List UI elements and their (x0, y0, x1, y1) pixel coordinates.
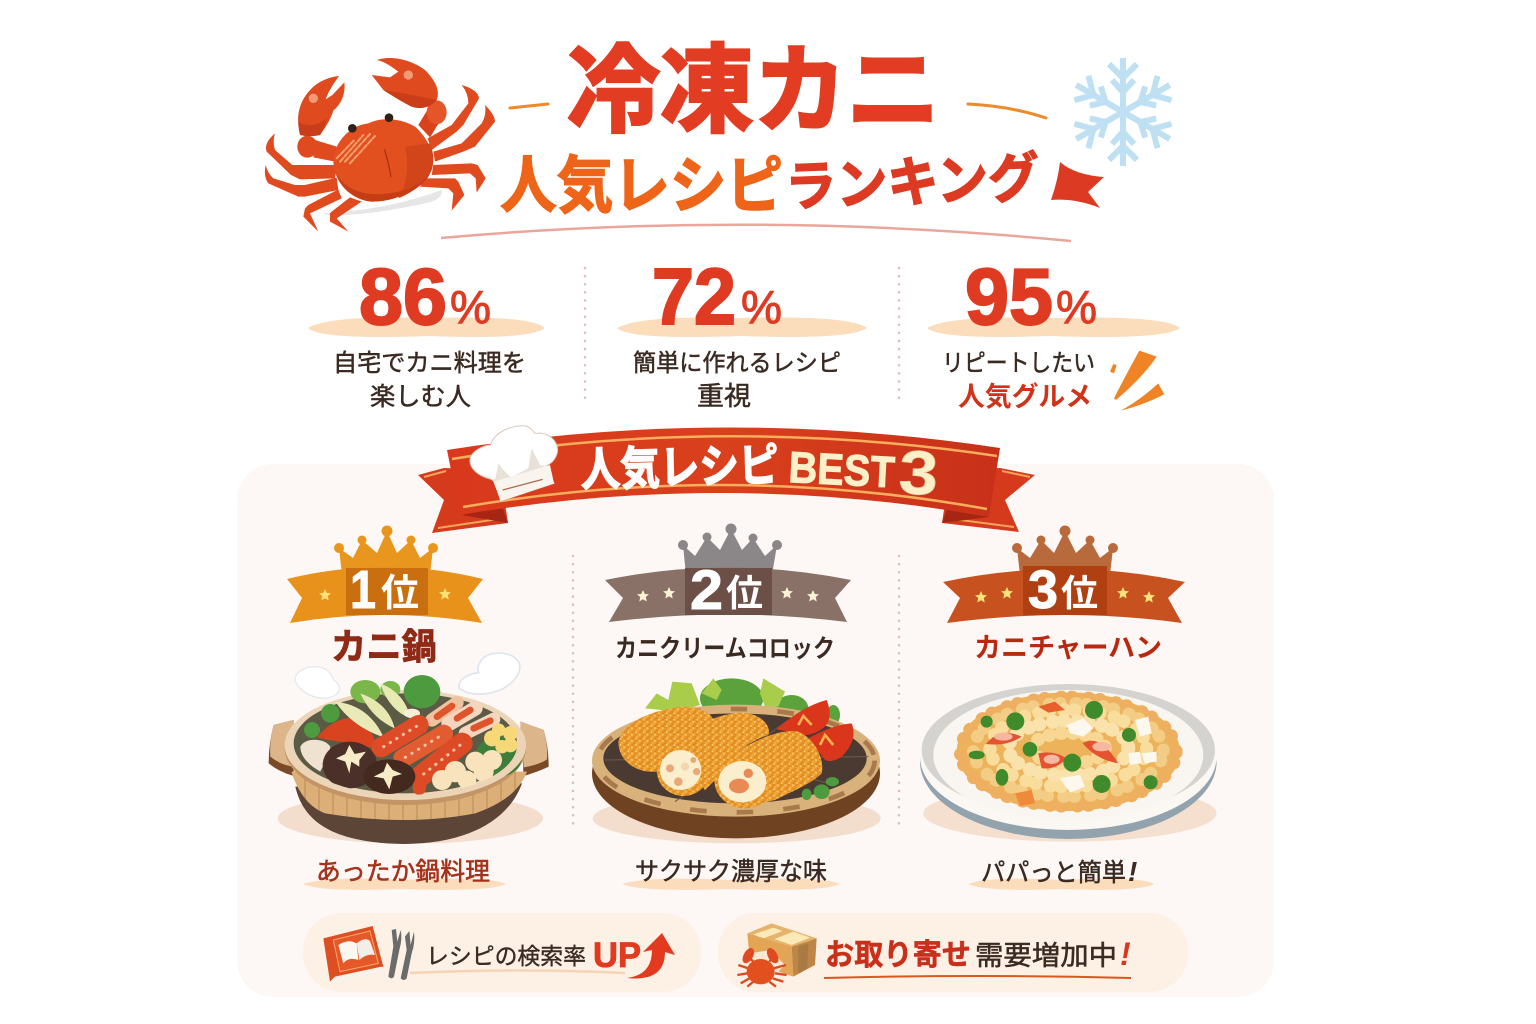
crown: bronze (1012, 526, 1118, 575)
icon: up arrow (627, 933, 675, 978)
tagline: サクサク濃厚な味: サクサク濃厚な味 (635, 852, 827, 888)
crown: silver (678, 524, 782, 575)
tagline: パパっと簡単！: ! (1128, 856, 1137, 887)
title (500, 13, 1040, 225)
banner: 1位: 位 (381, 562, 419, 617)
banner: 1位: 1 (350, 560, 376, 620)
banner: 1位 (287, 560, 483, 623)
stat: 86%: % (450, 281, 491, 333)
ribbon heading: BEST (787, 443, 896, 498)
rank 1 column (269, 526, 549, 890)
icon: crab (265, 58, 495, 232)
stat: 72%: % (741, 281, 782, 333)
callout: search rate up (303, 913, 701, 992)
rank 3 column (920, 526, 1217, 890)
stat: 86%: 自宅でカニ料理を (333, 343, 526, 378)
crown: gold (334, 526, 438, 575)
icon: recipe book (323, 926, 383, 983)
title line 2: ランキング (784, 133, 1040, 222)
callout: search rate up: レシピの検索率 (426, 937, 586, 971)
icon: small crab (737, 946, 787, 987)
stat: 95%: 人気グルメ (958, 375, 1092, 414)
icon: red flag (1051, 162, 1104, 208)
banner: 3位: 3 (1028, 560, 1058, 620)
ribbon heading: 人気レシピ (580, 429, 779, 500)
callout: search rate up: UP (593, 936, 641, 975)
stat: 86%: 楽しむ人 (370, 377, 471, 413)
title line 2 (500, 133, 1040, 225)
ribbon heading: 3 (897, 438, 940, 509)
stat: 95%: リピートしたい (942, 343, 1095, 378)
dish name: カニチャーハン: カニチャーハン (974, 626, 1162, 665)
dish name: カニ鍋: カニ鍋 (331, 618, 437, 670)
callout: mail order demand rising: ! (1120, 936, 1131, 972)
illustration: crab fried rice (920, 683, 1217, 842)
tagline: パパっと簡単！: パパっと簡単 (981, 853, 1126, 889)
callout: mail order demand rising: 需要増加中 (975, 934, 1117, 973)
illustration: crab cream croquettes (592, 678, 881, 843)
stat: 72%: 重視 (697, 376, 751, 413)
tagline: あったか鍋料理: あったか鍋料理 (316, 852, 490, 888)
dish name: カニクリームコロック: カニクリームコロック (615, 629, 835, 665)
stat: 72%: 簡単に作れるレシピ (633, 343, 841, 378)
stat: 95% (927, 252, 1180, 414)
stat: 95%: 95 (965, 252, 1053, 341)
banner: 3位 (943, 560, 1185, 623)
banner: 2位: 2 (690, 558, 723, 621)
stat: 86% (308, 252, 545, 413)
title line 1: 冷凍カニ (567, 13, 940, 152)
banner: 3位: 位 (1061, 563, 1098, 617)
title line 2: 人気レシピ (500, 135, 783, 225)
stat: 72%: 72 (652, 252, 736, 341)
banner: 2位: 位 (726, 563, 763, 617)
callout: mail order demand rising (718, 913, 1188, 992)
stat: 86%: 86 (359, 252, 447, 341)
banner: 2位 (605, 558, 851, 622)
background panel (237, 464, 1274, 997)
dotted dividers (573, 268, 899, 830)
callout: mail order demand rising: お取り寄せ (825, 930, 971, 974)
stat: 95%: % (1056, 281, 1097, 333)
icon: fork and knife (388, 929, 414, 980)
icon: burst accent (1110, 351, 1164, 411)
icon: snowflake (1069, 58, 1177, 166)
stat: 72% (617, 252, 867, 413)
rank 2 column (592, 524, 881, 890)
icon: chef hat (470, 426, 558, 501)
ribbon heading (418, 426, 1035, 533)
illustration: crab hot pot (269, 653, 549, 844)
icon: cardboard box (747, 923, 817, 977)
